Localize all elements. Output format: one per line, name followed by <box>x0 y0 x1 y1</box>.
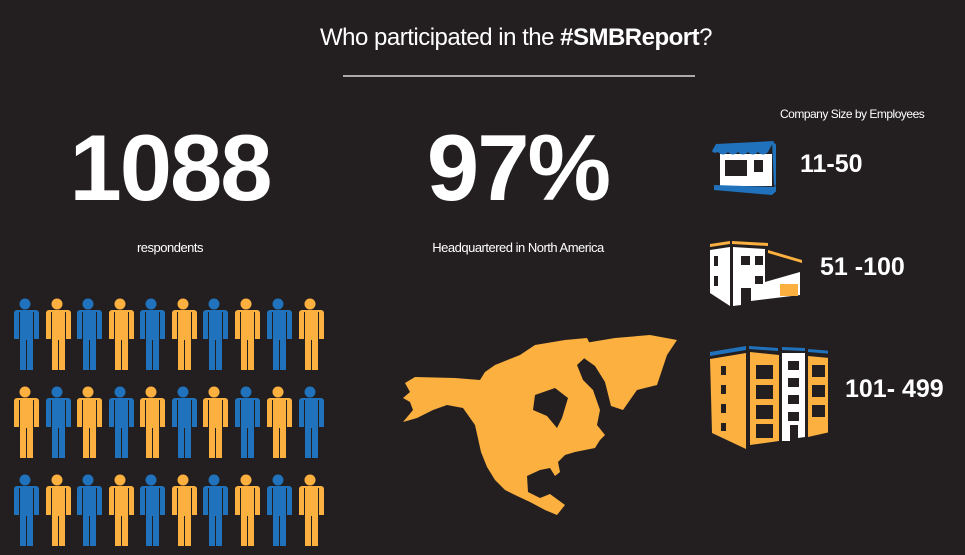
icon: apartment building <box>710 346 828 449</box>
heading: company size: Company Size by Employees <box>780 107 924 121</box>
stat: headquartered: Headquartered in North America <box>432 240 604 255</box>
stat: respondents: respondents <box>137 240 203 255</box>
stat: headquartered: 97% <box>427 115 609 220</box>
title: Who participated in the #SMBReport? <box>320 24 712 51</box>
icon: storefront <box>712 141 776 195</box>
label: 51-100: 51 -100 <box>820 253 905 281</box>
people grid <box>14 298 324 546</box>
divider <box>343 75 695 77</box>
map: North America <box>403 335 677 515</box>
label: 101-499: 101- 499 <box>845 375 944 403</box>
icon: office building <box>710 241 802 306</box>
stat: respondents: 1088 <box>69 115 271 220</box>
label: 11-50: 11-50 <box>800 150 863 178</box>
